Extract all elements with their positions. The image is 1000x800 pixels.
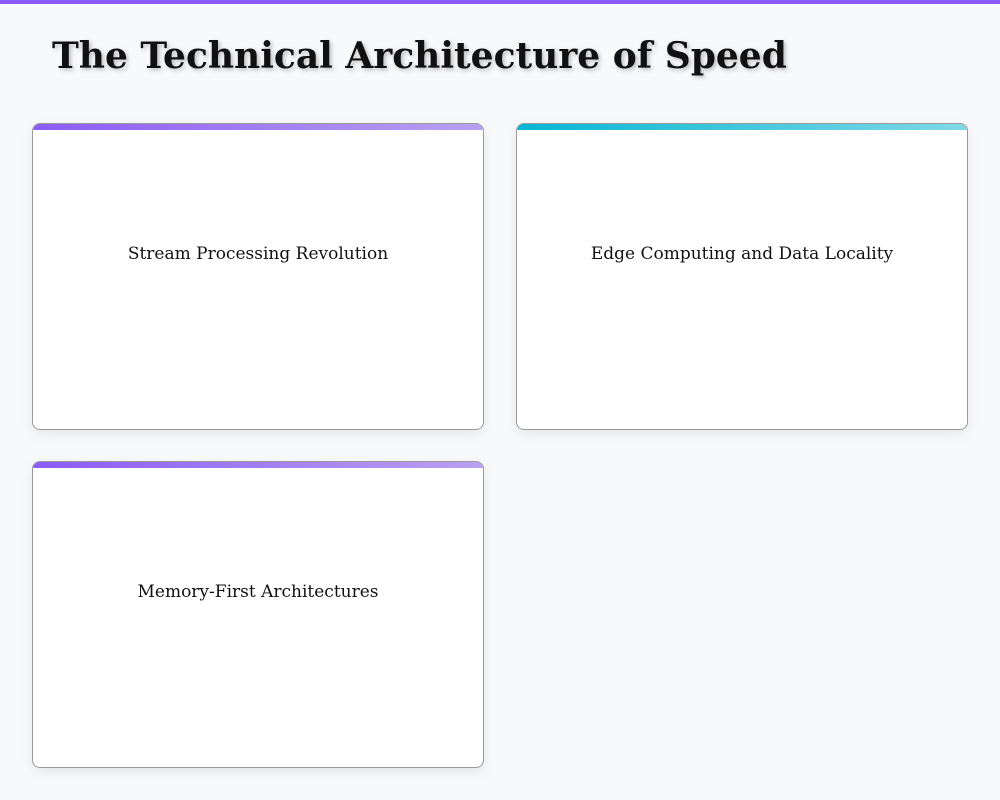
panel: stream processing xyxy=(32,123,484,430)
heading: stream processing: Stream Processing Revolution xyxy=(128,244,388,264)
panel: edge computing xyxy=(516,123,968,430)
heading: memory-first: Memory-First Architectures xyxy=(137,582,379,602)
panel: memory-first xyxy=(32,461,484,768)
heading: edge computing: Edge Computing and Data Locality xyxy=(591,244,893,264)
title: The Technical Architecture of Speed xyxy=(52,35,787,77)
